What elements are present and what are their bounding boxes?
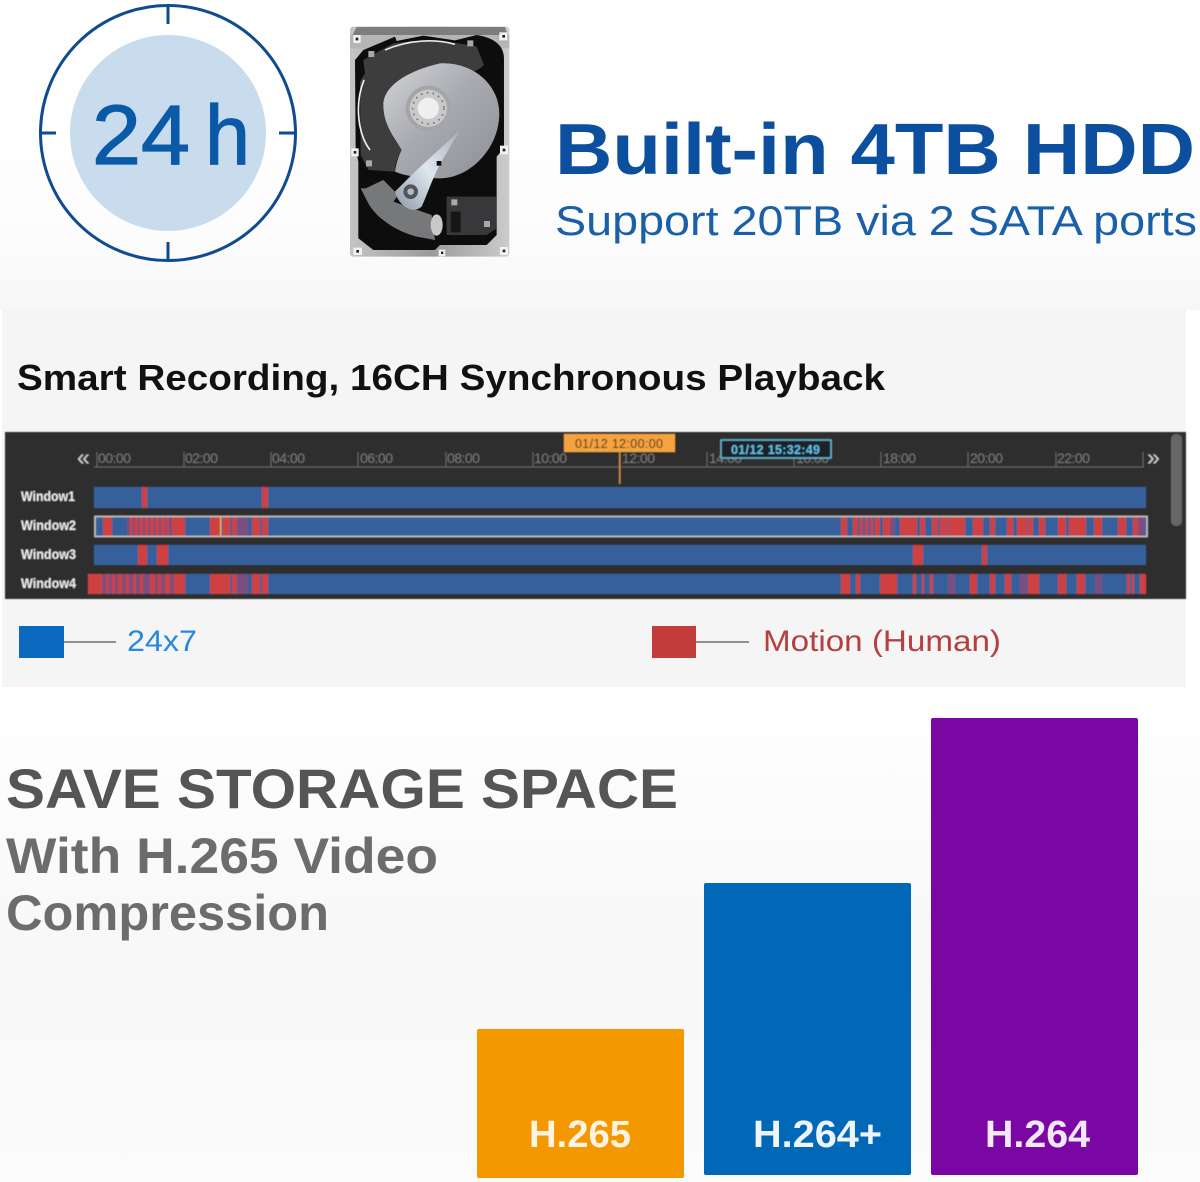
selected row outline <box>95 516 1147 536</box>
time axis labels: 18:00 <box>883 450 916 466</box>
legend: 24x7 <box>19 625 197 658</box>
bar: H.264: H.264 <box>985 1114 1090 1156</box>
time axis labels: 06:00 <box>360 450 393 466</box>
panel: smart recording <box>2 310 1186 687</box>
orange time marker <box>564 434 675 484</box>
bar chart: codec storage <box>477 718 1138 1178</box>
blue hover time marker: 01/12 15:32:49 <box>731 443 820 457</box>
subheading: SATA support: Support 20TB via 2 SATA ports <box>555 197 1197 244</box>
row labels: Window3 <box>21 547 76 562</box>
time axis labels: 02:00 <box>185 450 218 466</box>
playback timeline screenshot: « <box>77 444 90 470</box>
playback timeline screenshot <box>5 432 1186 599</box>
time axis labels: 04:00 <box>272 450 305 466</box>
time axis labels: 08:00 <box>447 450 480 466</box>
time axis labels: 14:00 <box>709 450 742 466</box>
bar: H.265 <box>477 1029 684 1178</box>
bar: H.264 <box>931 718 1138 1175</box>
row labels <box>21 489 76 591</box>
time axis labels: 12:00 <box>622 450 655 466</box>
legend: motion human <box>652 625 1001 658</box>
blue hover time marker <box>721 440 831 458</box>
bar: H.265: H.265 <box>529 1114 631 1156</box>
time axis labels: 20:00 <box>970 450 1003 466</box>
row labels: Window4 <box>21 576 76 591</box>
bar: H.264+ <box>704 883 911 1175</box>
row labels: Window1 <box>21 489 75 504</box>
time axis labels: 16:00 <box>796 450 829 466</box>
panel heading: Smart Recording, 16CH Synchronous Playback <box>17 357 886 398</box>
motion segments <box>88 487 1146 594</box>
icon: hard disk drive <box>350 27 509 257</box>
subheading: H.265 compression: With H.265 Video <box>6 828 438 884</box>
recording rows <box>94 487 1147 594</box>
orange time marker: 01/12 12:00:00 <box>575 437 663 451</box>
heading: save storage space: SAVE STORAGE SPACE <box>6 757 678 820</box>
bar: H.264+: H.264+ <box>753 1114 882 1156</box>
muted motion segments <box>102 517 1145 594</box>
row labels: Window2 <box>21 518 76 533</box>
icon: 24 hour clock: 24 <box>92 88 190 182</box>
subheading: H.265 compression <box>6 828 438 941</box>
playback timeline screenshot: » <box>1147 444 1160 470</box>
subheading: H.265 compression: Compression <box>6 885 329 941</box>
time axis labels <box>98 450 1090 466</box>
time axis labels: 22:00 <box>1057 450 1090 466</box>
icon: 24 hour clock: h <box>205 88 250 182</box>
time axis labels: 00:00 <box>98 450 131 466</box>
legend: 24x7: 24x7 <box>127 625 197 658</box>
legend: motion human: Motion (Human) <box>763 625 1001 658</box>
heading: Built-in 4TB HDD: Built-in 4TB HDD <box>555 110 1195 190</box>
icon: 24 hour clock <box>40 5 296 261</box>
time axis labels: 10:00 <box>534 450 567 466</box>
